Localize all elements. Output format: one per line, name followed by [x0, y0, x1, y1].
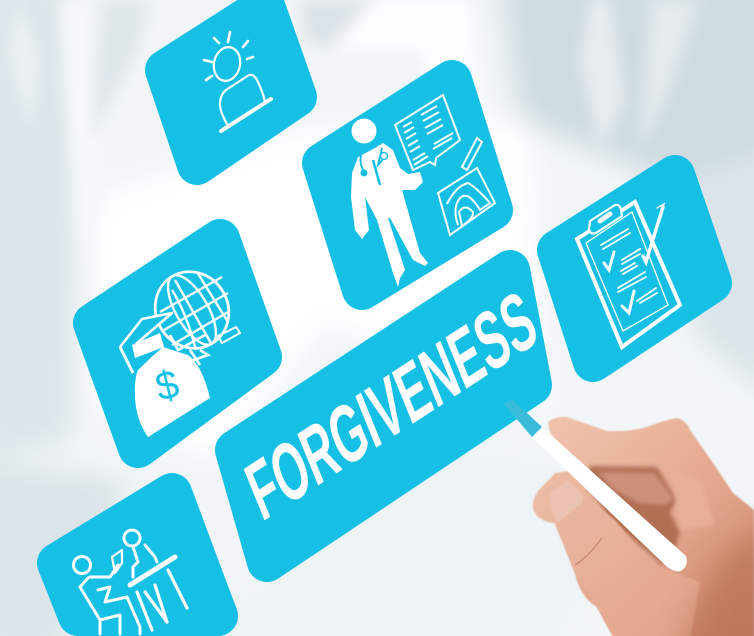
title: FORGIVENESS — [235, 273, 548, 538]
panel: clipboard — [557, 175, 712, 362]
icon: clipboard checklist — [577, 202, 680, 347]
panel: money and education — [93, 239, 262, 448]
icon: doctor figure — [351, 118, 428, 287]
panel: main forgiveness label — [235, 270, 548, 562]
thumb nail — [550, 480, 583, 523]
thumb — [550, 480, 700, 636]
finger shadows — [585, 466, 680, 565]
icon: person with light rays — [204, 32, 271, 131]
icon: open book — [395, 95, 460, 170]
pen — [532, 427, 687, 571]
icon: money bag — [135, 347, 210, 437]
icon: seated people — [74, 530, 187, 634]
hand — [533, 417, 754, 636]
icon: tool and x-ray — [438, 138, 495, 235]
icon: money bag: $ — [151, 362, 183, 410]
panel: two people at desk — [57, 493, 218, 634]
icon: graduation cap — [120, 313, 172, 373]
panel: person with idea — [165, 6, 297, 165]
icon: hand holding pen — [503, 400, 754, 636]
icon: globe — [141, 258, 243, 365]
panel: doctor with book — [322, 80, 495, 290]
